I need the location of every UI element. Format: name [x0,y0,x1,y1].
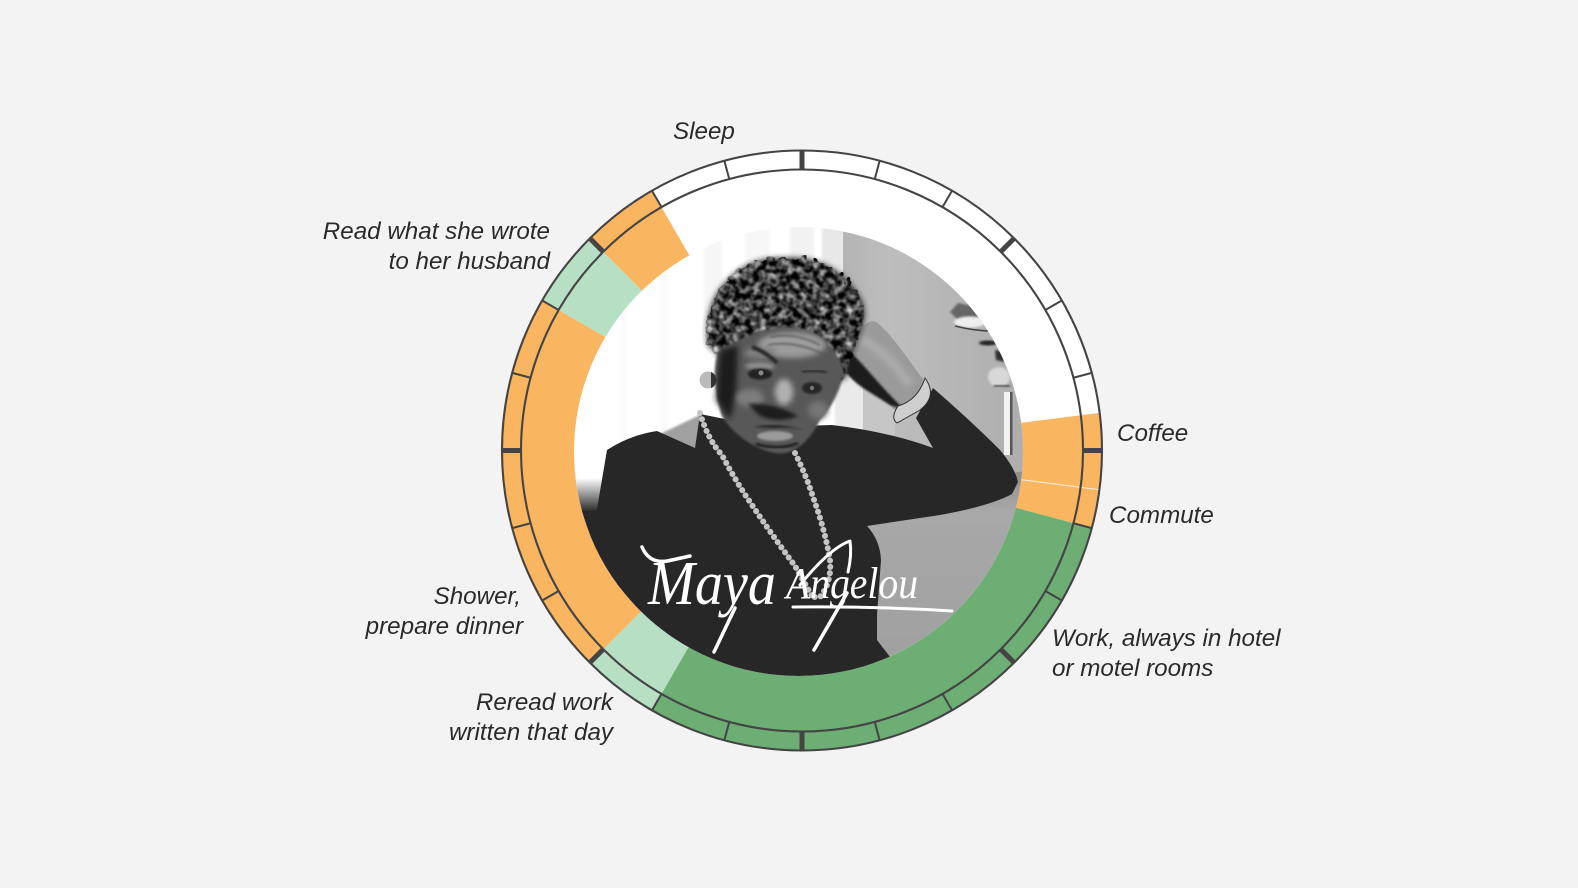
label: work: Work, always in hotel [1052,625,1281,652]
lamp [950,303,1012,455]
label: coffee: Coffee [1117,420,1188,447]
sector: commute [802,450,1099,528]
bracelet [894,378,930,423]
necklace [700,413,830,597]
face [715,327,844,453]
sector: morning review [542,238,802,450]
wall [843,225,1028,525]
label: shower, prepare dinner: Shower, [434,583,521,610]
label: reread work: Reread work [476,689,615,716]
sector: read what she wrote [590,191,802,450]
signature: Angelou [783,559,918,608]
label: read what she wrote: Read what she wrote [323,218,550,245]
sector: shower, prepare dinner [502,300,802,663]
panel: sleep sector (white disc) [502,150,1102,750]
hand and forearm [846,321,925,412]
label: reread work: written that day [449,719,615,746]
infographic: daily routine clock [324,122,1282,752]
sector: work [652,450,1092,750]
neck and shoulder skin [660,414,704,448]
hair [707,258,864,384]
signature [642,541,952,652]
left sofa shadow [576,478,602,512]
hour ticks [502,150,1102,750]
sofa [860,472,1022,668]
sector: reread work [590,450,802,710]
earring [700,372,717,388]
label: sleep: Sleep [673,118,735,145]
label: commute: Commute [1109,502,1214,529]
photo: portrait of Maya Angelou [570,225,1030,690]
curtain stripes [621,227,843,314]
label: work: or motel rooms [1052,655,1213,682]
signature: Maya [647,550,776,618]
sector: coffee [802,413,1102,490]
label: read what she wrote: to her husband [389,248,552,275]
body [570,388,1018,690]
ring outlines [502,150,1102,750]
label: shower, prepare dinner: prepare dinner [365,613,524,640]
